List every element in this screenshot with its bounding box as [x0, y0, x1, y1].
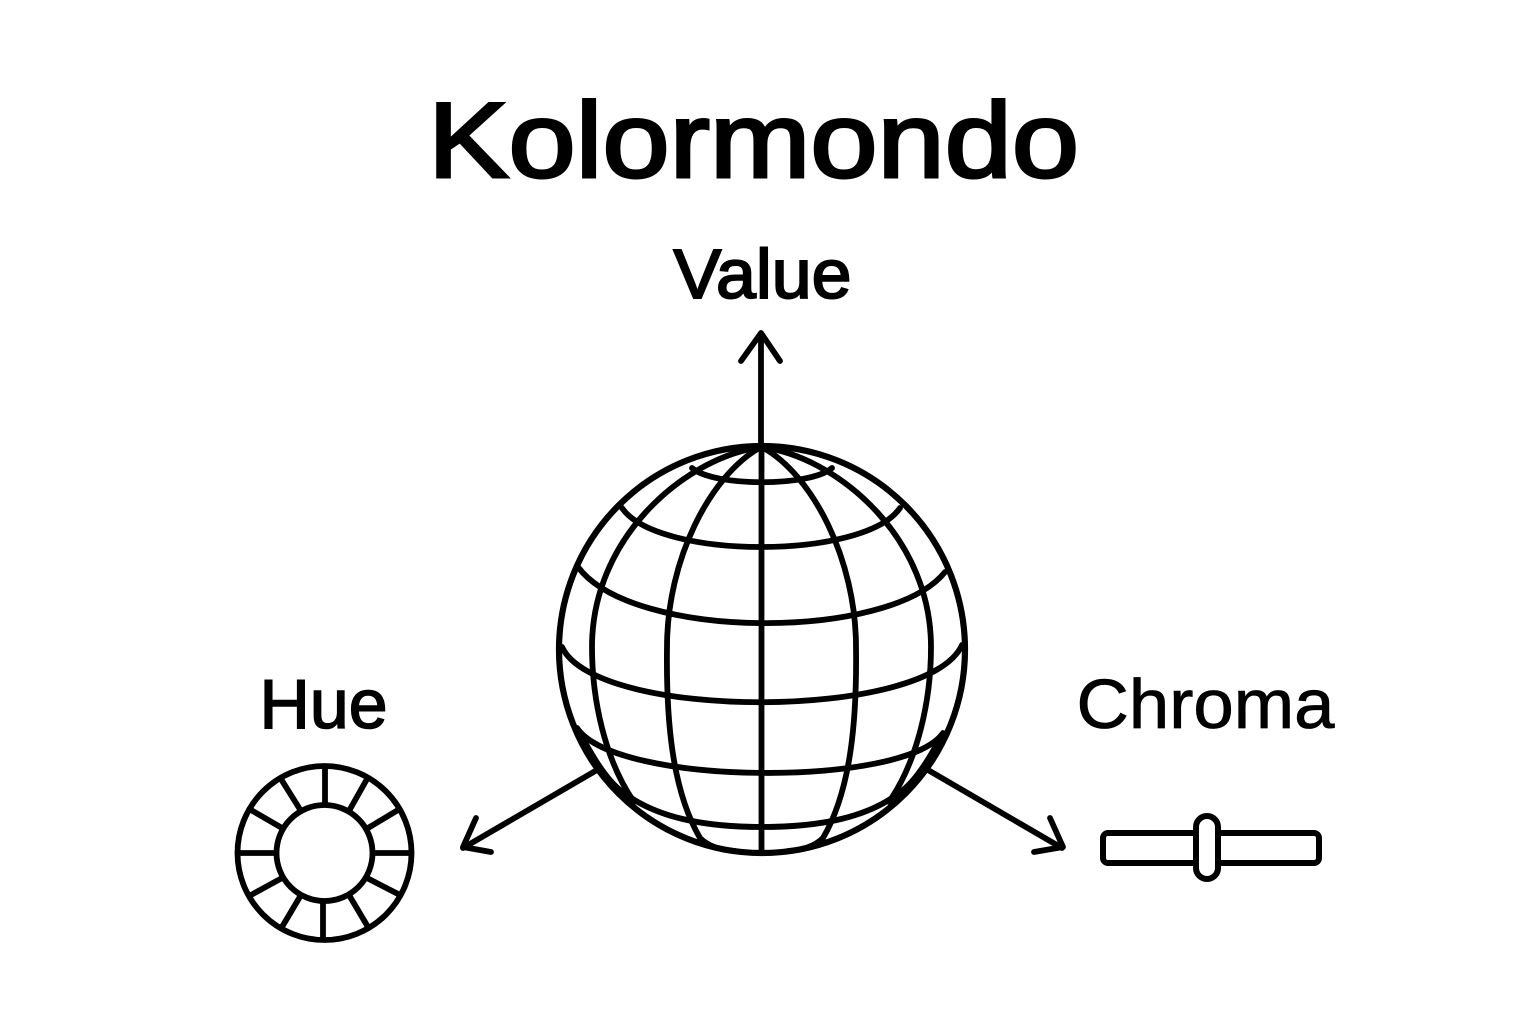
icon: hue wheel — [238, 766, 412, 940]
title: Kolormondo — [428, 80, 1079, 200]
label: Hue: Hue — [260, 665, 388, 743]
arrow: value axis — [741, 333, 780, 446]
meridians — [592, 446, 931, 853]
sphere outline — [559, 446, 965, 853]
parallels — [562, 468, 962, 827]
icon: colour sphere globe — [559, 446, 965, 853]
label: Chroma: Chroma — [1076, 665, 1335, 743]
slider knob — [1196, 816, 1218, 879]
icon: chroma slider — [1103, 816, 1319, 879]
slider track — [1103, 833, 1319, 863]
arrow: hue axis — [463, 770, 597, 852]
label: Value: Value — [674, 235, 852, 313]
arrow: chroma axis — [928, 770, 1063, 852]
